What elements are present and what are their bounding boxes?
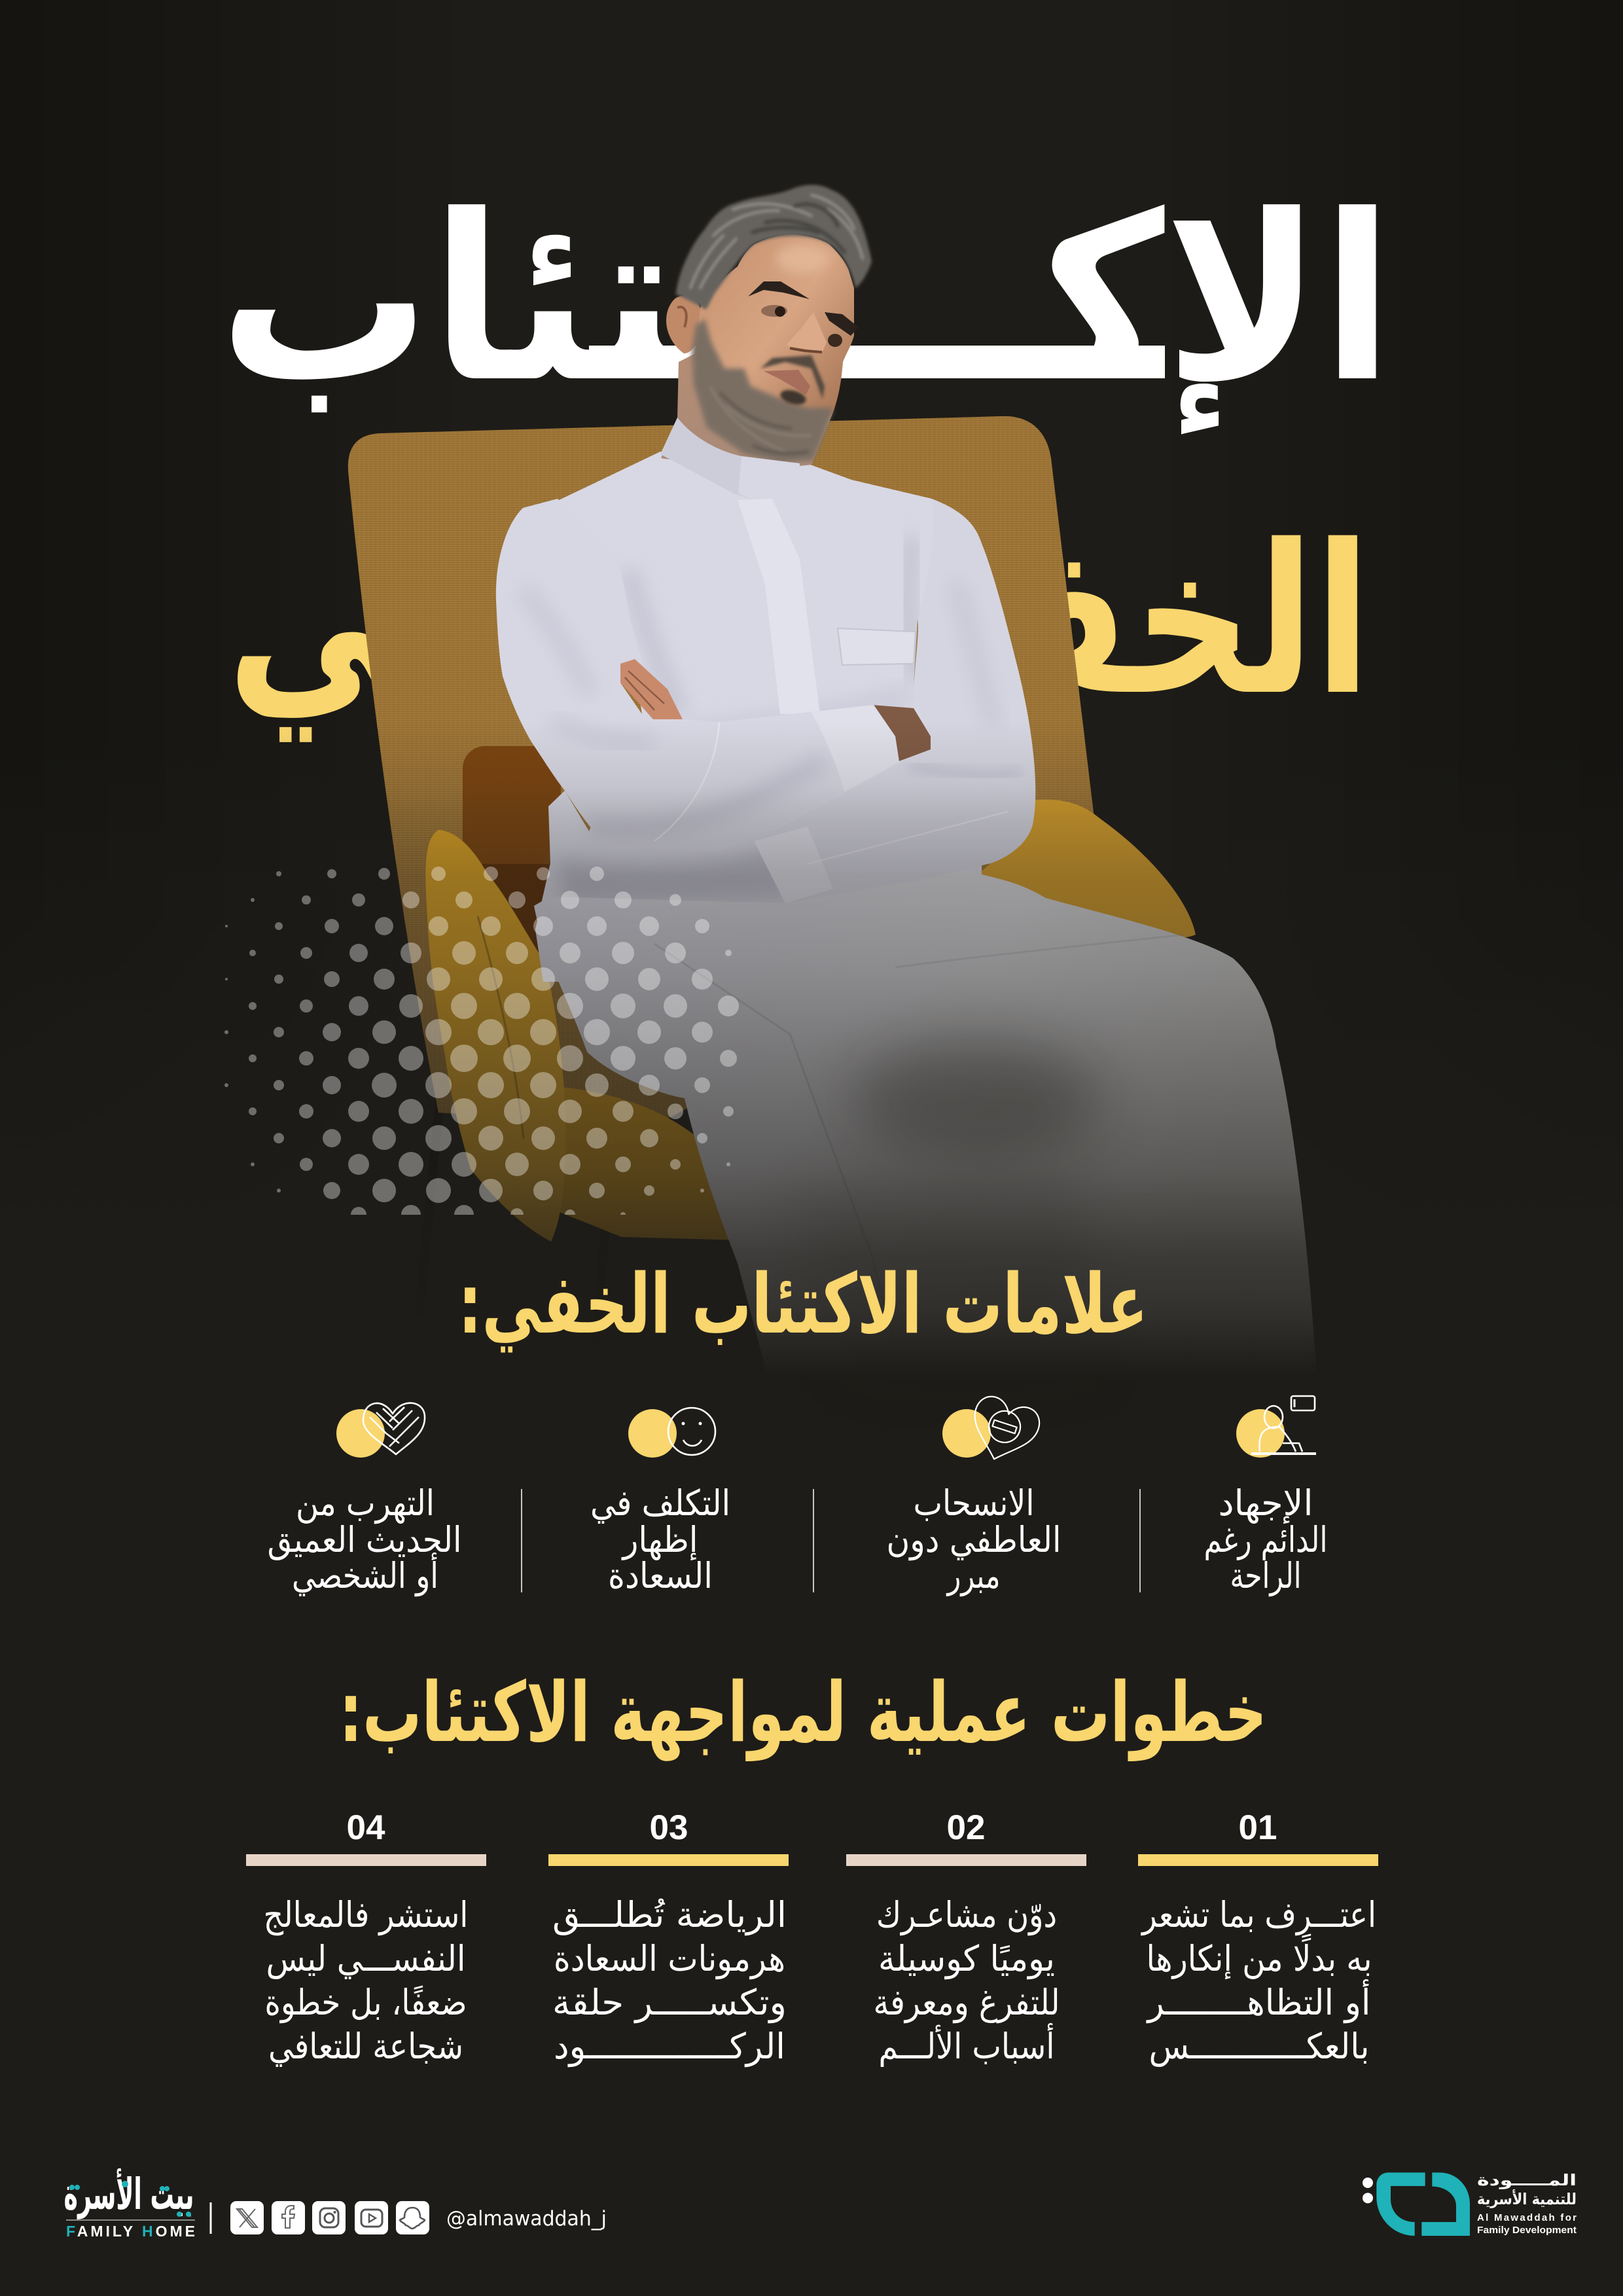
nose [787,312,827,351]
step 03: الرياضة تُطلـــق [552,1894,787,1936]
logo: family home: FAMILY HOME [66,2223,195,2240]
seat cushion [556,1086,743,1240]
icon: constant fatigue, circle with tired figure and battery [1236,1396,1316,1458]
eyebrows [748,281,859,336]
bottom fade overlay [0,720,1623,1381]
step 01: أو التظاهــــــــر [1146,1979,1370,2023]
logo: al mawaddah: Family Development [1477,2225,1577,2236]
sleeve seam [654,722,719,841]
signs text: constant fatigue: الإجهاد [1219,1482,1313,1524]
halftone dots [224,867,739,1225]
step 02: 02 [947,1808,985,1847]
photo: man seated on mustard armchair [348,185,1317,1381]
hair [676,185,872,310]
step 04 [246,1808,486,2067]
soul patch [779,387,808,407]
social icon: youtube [355,2201,388,2234]
viewer-right arm and lower sleeve [754,499,1035,903]
hand under arm [872,705,931,762]
logo: al mawaddah: المـــــودة [1477,2171,1577,2189]
arm shading [524,589,589,694]
social icon: x [230,2201,264,2234]
signs text: avoidance: الحديث العميق [267,1519,462,1561]
inner cushion [463,746,563,956]
signs text: constant fatigue: الدائم رغم [1204,1519,1327,1560]
title: depression: الإكـــــتئاب [219,166,1394,436]
step 02: دوّن مشاعـرك [876,1894,1057,1935]
forehead highlight [776,244,828,273]
step 01: اعتـــرف بما تشعر [1140,1894,1376,1935]
logo mark [1363,2172,1470,2236]
lips [764,370,810,395]
step 04: استشر فالمعالج [263,1894,469,1936]
heading: practical steps: خطوات عملية لمواجهة الاكتئاب: [339,1664,1267,1761]
signs text: emotional withdrawal: العاطفي دون [886,1519,1061,1560]
step 02 [846,1808,1086,2067]
step 03 [548,1808,789,2067]
lower robe [534,870,1317,1381]
knee shadow [851,1041,1099,1158]
mustache [760,355,825,399]
lower shin shadow [785,1178,1099,1374]
logo: family home [64,2168,195,2240]
left armrest cushion [425,830,565,1242]
icon: emotional withdrawal, circle with heart [942,1393,1044,1469]
signs text: emotional withdrawal [886,1482,1061,1596]
step 03: الركــــــــــــــود [554,2026,785,2067]
head [661,185,872,471]
logo: al mawaddah: Al Mawaddah for [1477,2212,1577,2223]
background [0,0,1623,788]
signs text: avoidance: أو الشخصي [292,1552,438,1596]
step 04: 04 [347,1808,385,1847]
signs text: forced happiness: التكلف في [590,1482,730,1524]
robe folds [654,935,1185,1381]
shadow below arms [556,844,792,903]
step 01: 01 [1239,1808,1277,1847]
social handle: @almawaddah_j [446,2207,607,2231]
step 02: يوميًا كوسيلة [878,1938,1055,1979]
signs text: avoidance: التهرب من [296,1482,435,1524]
upper cuff [812,705,899,792]
signs text: forced happiness: السعادة [608,1555,713,1596]
step 02: أسباب الألـــم [878,2023,1055,2067]
step 03: 03 [650,1808,688,1847]
heading: signs of hidden depression: علامات الاكتئاب الخفي: [458,1256,1148,1353]
logo: family home: بيت الأسرة [64,2168,194,2219]
chair back [348,416,1106,1126]
step 03: وتكســـــر حلقة [552,1982,787,2023]
sleeve shading [910,766,1021,775]
signs text: emotional withdrawal: مبرر [946,1555,1000,1596]
chest pocket [838,628,916,665]
collar [660,418,800,499]
signs text: avoidance [267,1482,462,1596]
icon: forced happiness, circle with smiley [628,1408,715,1458]
step 01: به بدلًا من إنكارها [1147,1933,1372,1979]
signs text: constant fatigue [1204,1482,1327,1596]
title: hidden: الخفـــــــــــي [227,501,1371,744]
torso [524,452,982,982]
cuff [754,827,833,903]
social icon: facebook [272,2201,305,2234]
beard [692,319,833,463]
step 03: هرمونات السعادة [554,1938,785,1979]
ear [666,296,702,353]
face [694,234,854,458]
signs text: forced happiness [590,1482,730,1596]
social icon: snapchat [396,2201,429,2234]
right armrest [973,800,1196,938]
logo: al mawaddah [1363,2171,1577,2236]
signs text: constant fatigue: الراحة [1230,1555,1301,1596]
viewer-left arm and upper forearm [496,499,899,851]
step 01 [1138,1808,1378,2067]
step 02: للتفرغ ومعرفة [873,1982,1060,2023]
placket [738,499,820,714]
hand on sleeve [620,659,683,719]
signs text: forced happiness: إظهار [621,1519,698,1560]
signs text: emotional withdrawal: الانسحاب [914,1482,1034,1524]
step 04: شجاعة للتعافي [268,2026,463,2067]
icon: avoidance, circle with heart and hands [336,1403,425,1458]
chair legs [419,1100,605,1342]
step 04: النفســـي ليس [266,1938,466,1979]
neck and jaw [661,314,843,471]
chest shading [628,569,681,713]
logo: al mawaddah: للتنمية الأسرية [1477,2189,1577,2208]
step 01: بالعكــــــــــــس [1149,2026,1369,2067]
eyes [761,305,842,347]
step 04: ضعفًا، بل خطوة [264,1982,467,2023]
social icon: instagram [312,2201,346,2234]
